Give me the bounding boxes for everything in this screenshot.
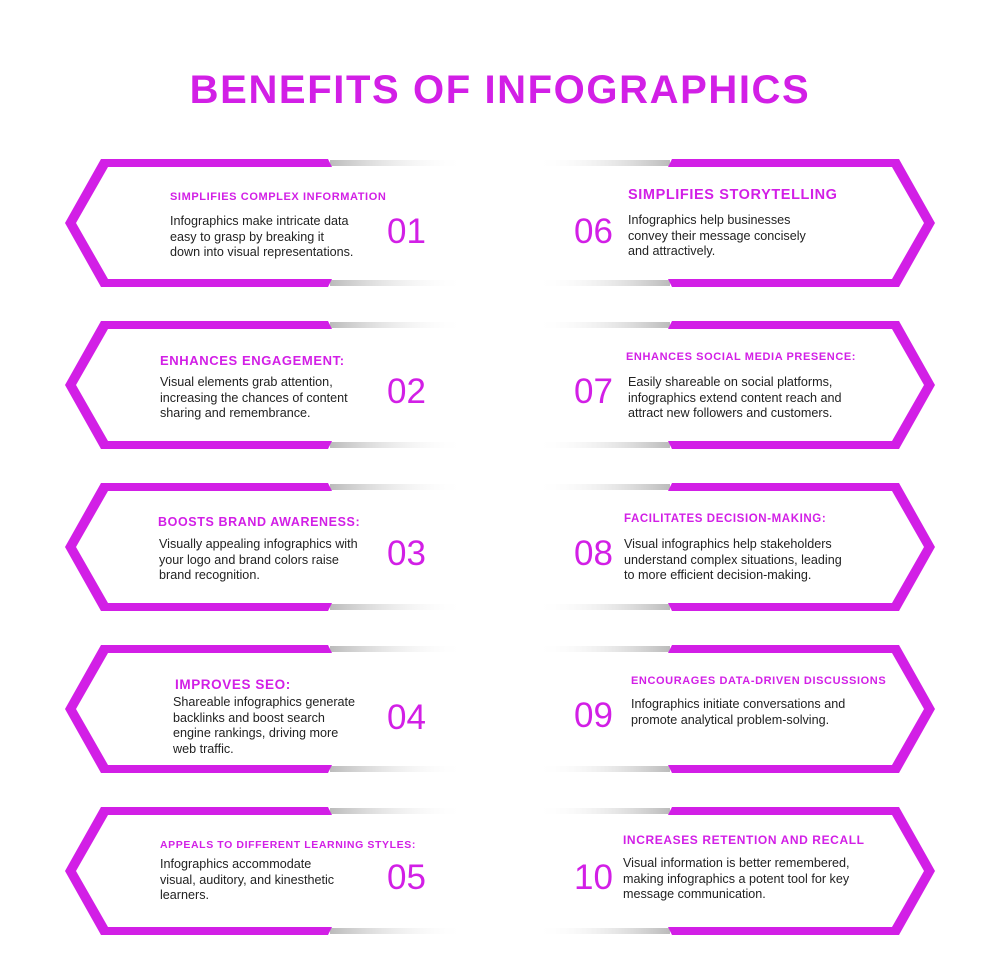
card 02: ENHANCES ENGAGEMENT: bbox=[160, 353, 345, 368]
card 10: 10 bbox=[574, 858, 613, 897]
card 01: easy to grasp by breaking it bbox=[170, 230, 324, 244]
card 06: Infographics help businesses bbox=[628, 213, 790, 227]
card 01: SIMPLIFIES COMPLEX INFORMATION bbox=[170, 191, 386, 203]
card 09: ENCOURAGES DATA-DRIVEN DISCUSSIONS bbox=[631, 675, 886, 687]
card 01: 01 bbox=[387, 212, 426, 251]
card 10: Visual information is better remembered, bbox=[623, 856, 850, 870]
card 04 bbox=[173, 677, 426, 756]
card 04: Shareable infographics generate bbox=[173, 695, 355, 709]
card 08 bbox=[574, 513, 842, 582]
card 10: INCREASES RETENTION AND RECALL bbox=[623, 833, 865, 847]
card 08: 08 bbox=[574, 534, 613, 573]
card 07: Easily shareable on social platforms, bbox=[628, 375, 832, 389]
title: BENEFITS OF INFOGRAPHICS bbox=[190, 68, 810, 112]
card 03: Visually appealing infographics with bbox=[159, 537, 358, 551]
card 10: making infographics a potent tool for key bbox=[623, 872, 849, 886]
card 06: and attractively. bbox=[628, 244, 715, 258]
card 06: SIMPLIFIES STORYTELLING bbox=[628, 187, 838, 203]
card 08: to more efficient decision-making. bbox=[624, 568, 811, 582]
card 04: backlinks and boost search bbox=[173, 710, 325, 724]
card 09: Infographics initiate conversations and bbox=[631, 697, 845, 711]
card 09 bbox=[574, 675, 886, 735]
card 02: increasing the chances of content bbox=[160, 390, 348, 404]
card 09: 09 bbox=[574, 696, 613, 735]
card 03: 03 bbox=[387, 534, 426, 573]
card 05: APPEALS TO DIFFERENT LEARNING STYLES: bbox=[160, 839, 416, 851]
card 03: your logo and brand colors raise bbox=[159, 552, 339, 566]
card 03: BOOSTS BRAND AWARENESS: bbox=[158, 515, 360, 529]
card 01 bbox=[170, 191, 426, 259]
card 07: 07 bbox=[574, 372, 613, 411]
card 08: Visual infographics help stakeholders bbox=[624, 537, 832, 551]
card 03 bbox=[158, 515, 426, 582]
card 07: infographics extend content reach and bbox=[628, 390, 842, 404]
card 06: 06 bbox=[574, 212, 613, 251]
card 05: learners. bbox=[160, 888, 209, 902]
card 08: understand complex situations, leading bbox=[624, 552, 842, 566]
card 06 bbox=[574, 187, 838, 258]
card 10: message communication. bbox=[623, 887, 766, 901]
card 02 bbox=[160, 353, 426, 420]
card 02: sharing and remembrance. bbox=[160, 406, 311, 420]
card 07: attract new followers and customers. bbox=[628, 406, 832, 420]
card 03: brand recognition. bbox=[159, 568, 260, 582]
card 04: IMPROVES SEO: bbox=[175, 677, 291, 692]
card 04: 04 bbox=[387, 698, 426, 737]
card 01: Infographics make intricate data bbox=[170, 214, 349, 228]
card 02: Visual elements grab attention, bbox=[160, 375, 333, 389]
card 05: Infographics accommodate bbox=[160, 857, 311, 871]
card 06: convey their message concisely bbox=[628, 228, 806, 242]
card 07: ENHANCES SOCIAL MEDIA PRESENCE: bbox=[626, 351, 856, 363]
card 05 bbox=[160, 839, 426, 902]
card 10 bbox=[574, 833, 865, 901]
card 05: visual, auditory, and kinesthetic bbox=[160, 872, 334, 886]
card 02: 02 bbox=[387, 372, 426, 411]
card 05: 05 bbox=[387, 858, 426, 897]
card 07 bbox=[574, 351, 856, 420]
card 09: promote analytical problem-solving. bbox=[631, 712, 829, 726]
card 04: engine rankings, driving more bbox=[173, 726, 338, 740]
card 01: down into visual representations. bbox=[170, 245, 353, 259]
card 08: FACILITATES DECISION-MAKING: bbox=[624, 513, 826, 525]
card 04: web traffic. bbox=[173, 742, 234, 756]
